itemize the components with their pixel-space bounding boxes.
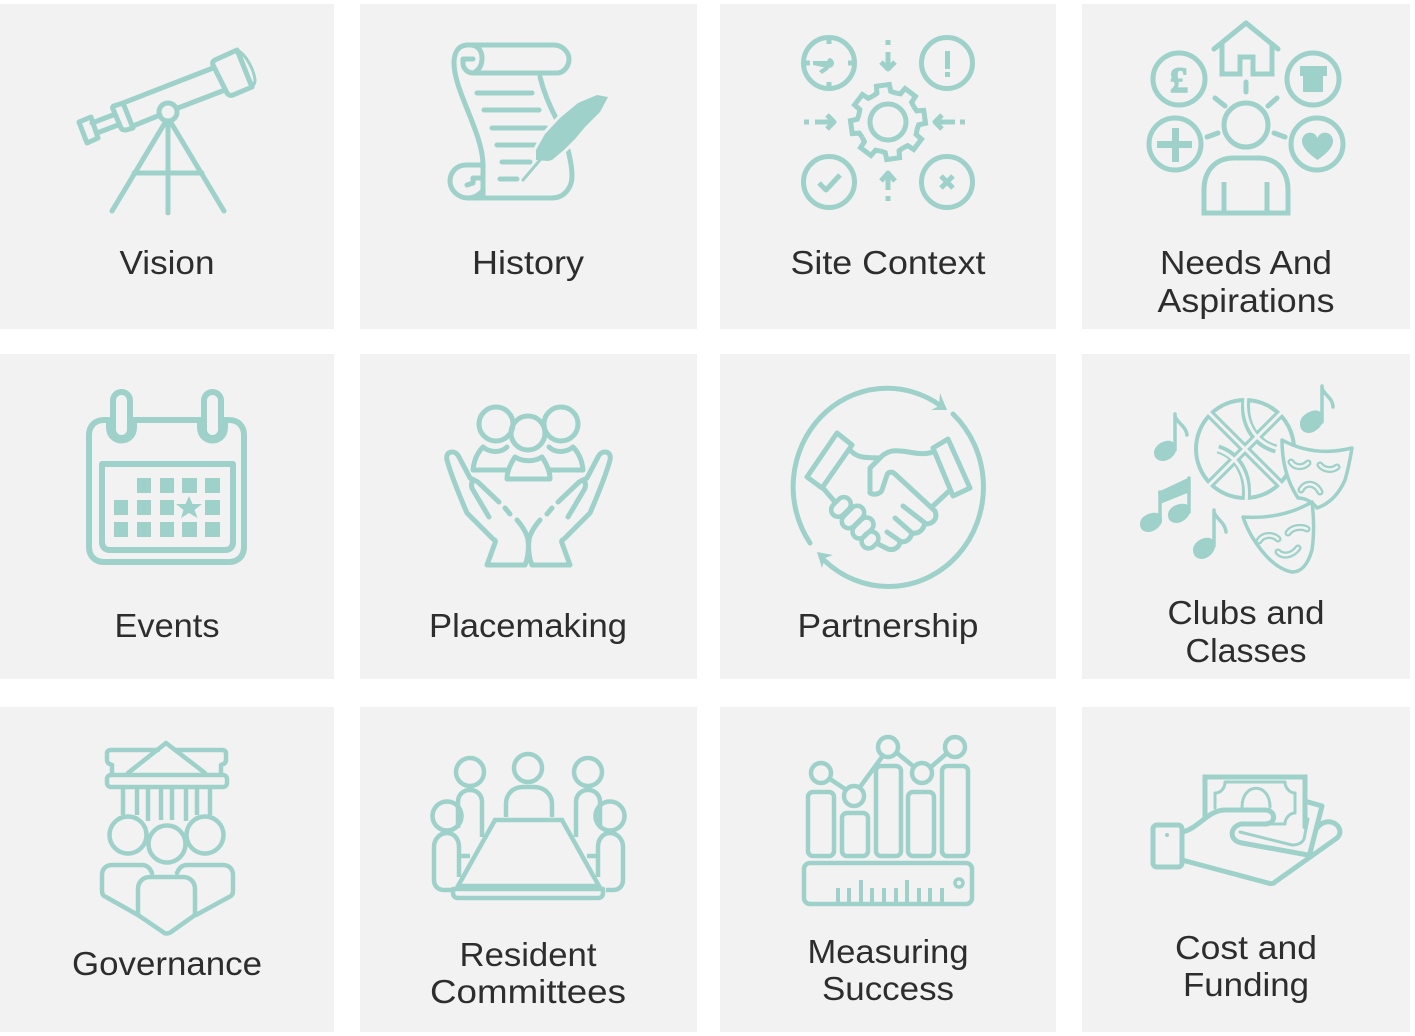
label: Cost and Funding: Funding bbox=[1183, 966, 1309, 1003]
panel: Clubs and Classes bbox=[1082, 354, 1410, 679]
label: Needs And Aspirations: Aspirations bbox=[1158, 282, 1334, 319]
icon: hands holding people bbox=[447, 407, 610, 565]
label: Vision: Vision bbox=[120, 244, 214, 281]
clock hands and exclamation mark bbox=[813, 51, 950, 77]
panel: Vision bbox=[0, 4, 334, 329]
panel: Partnership bbox=[720, 354, 1056, 679]
icon: gear with surrounding symbols bbox=[804, 38, 972, 208]
panel: Needs And Aspirations bbox=[1082, 4, 1410, 329]
label: Measuring Success: Measuring bbox=[808, 933, 968, 970]
label: Site Context: Site Context bbox=[790, 244, 986, 281]
comedy and tragedy masks bbox=[1282, 440, 1352, 508]
music notes bbox=[1160, 386, 1333, 546]
icon: bar chart with line bbox=[804, 737, 972, 904]
label: Measuring Success bbox=[808, 933, 968, 1007]
icon: music, basketball and masks bbox=[1140, 386, 1352, 572]
cuff button bbox=[1165, 833, 1169, 837]
label: Placemaking: Placemaking bbox=[429, 607, 627, 644]
quill feather bbox=[536, 95, 608, 161]
label: Resident Committees bbox=[430, 936, 626, 1010]
label: Clubs and Classes: Clubs and bbox=[1168, 594, 1324, 631]
pound sign: £ bbox=[1170, 60, 1188, 100]
icon: hand holding money bbox=[1153, 777, 1340, 884]
label: Events: Events bbox=[114, 607, 220, 644]
label: Needs And Aspirations bbox=[1158, 244, 1334, 319]
label: Resident Committees: Committees bbox=[430, 973, 626, 1010]
icon: calendar bbox=[89, 392, 244, 562]
label: Needs And Aspirations: Needs And bbox=[1160, 244, 1332, 281]
label: Cost and Funding bbox=[1175, 929, 1317, 1003]
label: Clubs and Classes bbox=[1168, 594, 1324, 669]
icon: handshake in circle bbox=[793, 388, 983, 586]
label: Governance: Governance bbox=[72, 945, 262, 982]
cycle arrowheads bbox=[817, 393, 947, 568]
basketball bbox=[1196, 396, 1294, 502]
label: Measuring Success: Success bbox=[822, 970, 954, 1007]
label: Partnership: Partnership bbox=[798, 607, 978, 644]
label: Cost and Funding: Cost and bbox=[1175, 929, 1317, 966]
panel: Events bbox=[0, 354, 334, 679]
icon: people around a table bbox=[432, 754, 624, 898]
box, plus, heart glyphs bbox=[1157, 66, 1333, 162]
panel: History bbox=[360, 4, 697, 329]
label: History: History bbox=[472, 244, 585, 281]
panel: Cost and Funding bbox=[1082, 707, 1410, 1032]
icon: person with needs bbox=[1149, 23, 1343, 213]
icon: telescope bbox=[79, 50, 255, 213]
label: Clubs and Classes: Classes bbox=[1186, 632, 1306, 669]
panel: Resident Committees bbox=[360, 707, 697, 1032]
icon: building above people bbox=[102, 743, 233, 934]
star bbox=[176, 496, 202, 518]
panel: Site Context bbox=[720, 4, 1056, 329]
panel: Placemaking bbox=[360, 354, 697, 679]
panel: Measuring Success bbox=[720, 707, 1056, 1032]
icon: scroll and quill bbox=[450, 45, 608, 198]
label: Resident Committees: Resident bbox=[460, 936, 596, 973]
panel: Governance bbox=[0, 707, 334, 1032]
